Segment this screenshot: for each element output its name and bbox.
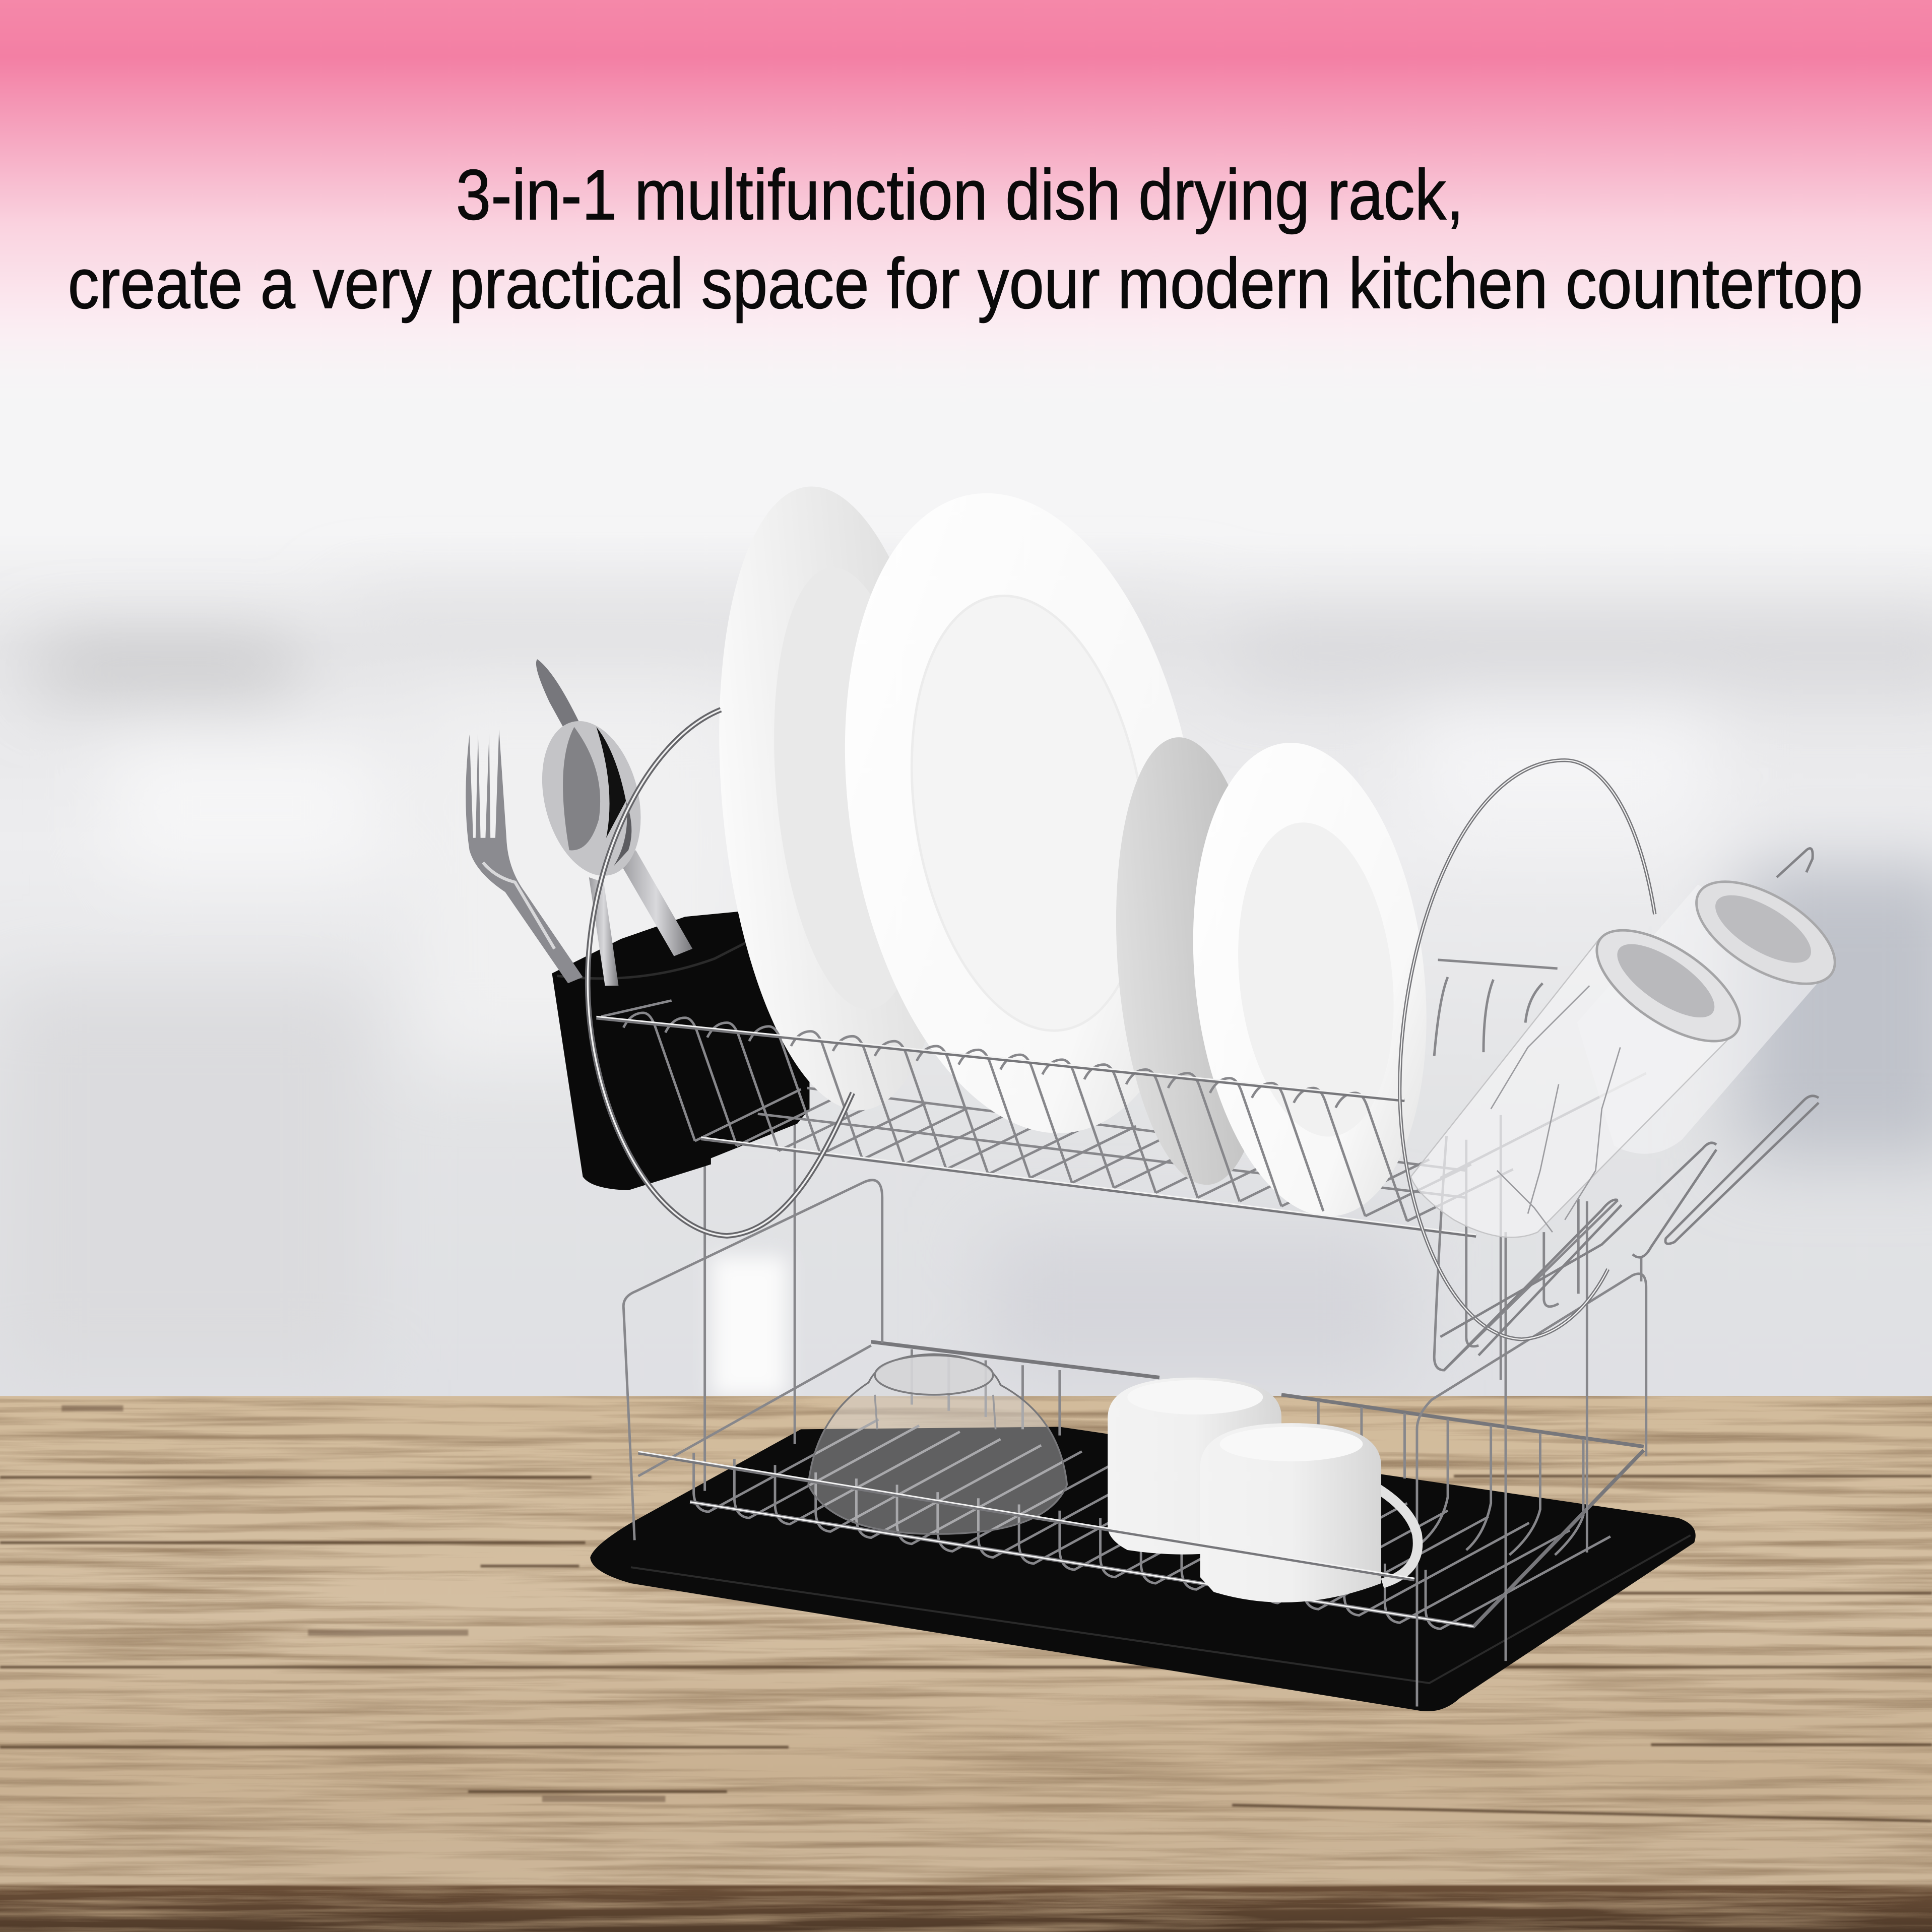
right utensil hook wires: [1440, 849, 1819, 1370]
right glass holder wires: [1434, 960, 1646, 1380]
pink gradient header band: [0, 0, 1932, 407]
black drip tray: [590, 1427, 1696, 1711]
lower rack front rail: [638, 1451, 1414, 1580]
wooden countertop: [0, 1396, 1932, 1932]
back mug: [1108, 1378, 1281, 1555]
glass bowl: [808, 1354, 1067, 1534]
back small plate: [1102, 732, 1283, 1190]
upper rack grid under plates: [601, 1000, 1513, 1221]
dish rack product: [466, 468, 1851, 1711]
front mug: [1200, 1423, 1381, 1602]
back large plate: [695, 477, 976, 1120]
back tumbler: [1577, 861, 1851, 1154]
large white plates: [695, 468, 1244, 1159]
frame posts and side panels: [623, 1022, 1646, 1707]
left lid holder ring: [588, 710, 853, 1236]
right lid holder ring: [1400, 760, 1655, 1339]
icon: knife: [536, 659, 692, 956]
blurred kitchen background: [0, 0, 1932, 1404]
black cutlery holder: [552, 911, 809, 1190]
icon: spoon: [527, 711, 656, 986]
white mugs: [1108, 1378, 1418, 1602]
title text: [68, 155, 1863, 324]
front tumbler: [1411, 909, 1758, 1238]
front small plate: [1171, 731, 1449, 1228]
bright gap between rack posts: [712, 1257, 786, 1396]
lower rack back wires and grid: [638, 1342, 1644, 1629]
small white plates: [1102, 731, 1449, 1228]
mug handle: [1378, 1489, 1418, 1583]
icon: fork: [466, 730, 583, 983]
upper rack front wires: [596, 1013, 1476, 1236]
glass tumblers: [1411, 861, 1851, 1238]
title text: 3-in-1 multifunction dish drying rack,: [456, 155, 1464, 235]
front large plate: [802, 468, 1244, 1159]
